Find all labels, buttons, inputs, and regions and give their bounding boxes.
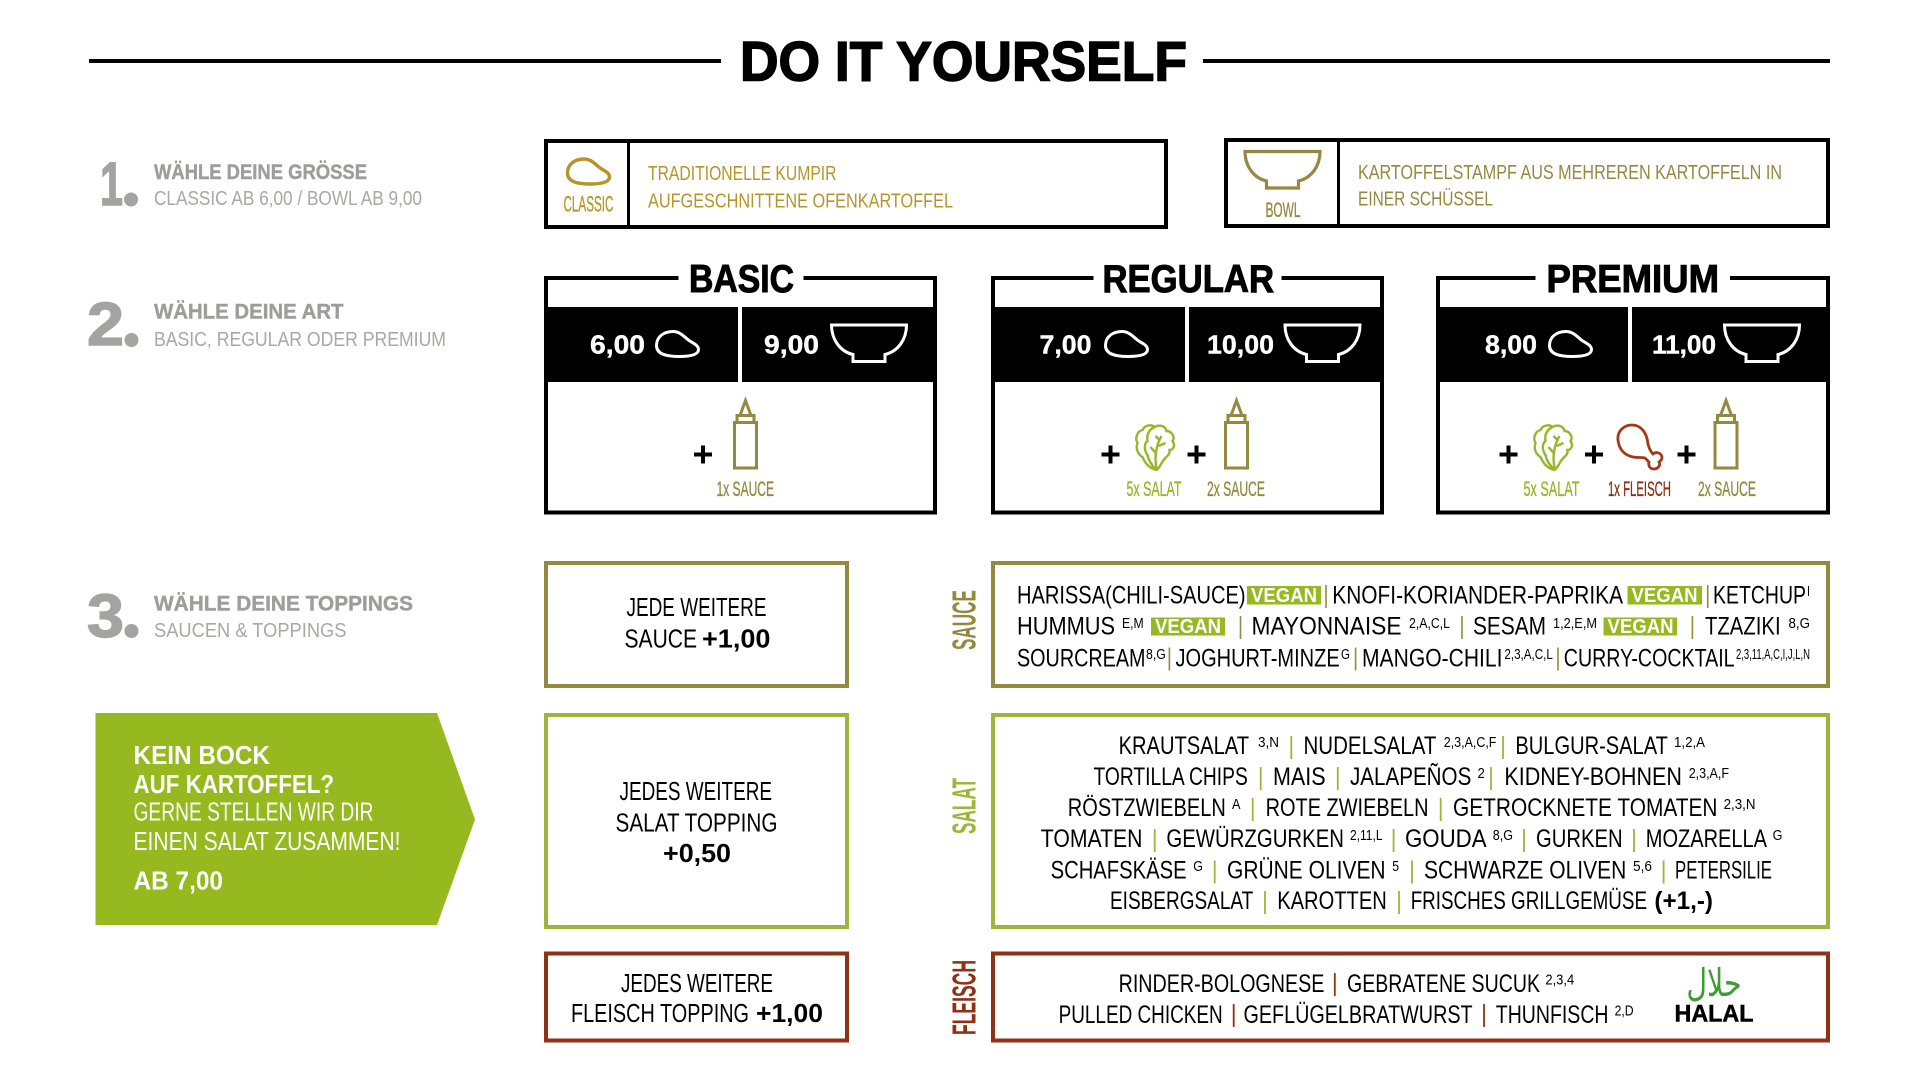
panel: salat list: SCHWARZE OLIVEN — [1424, 856, 1626, 884]
panel: extra salad price — [546, 715, 847, 927]
panel: sauce list: TZAZIKI — [1705, 613, 1781, 641]
panel: classic size: AUFGESCHNITTENE OFENKARTOFFEL — [648, 190, 953, 212]
callout: salad arrow: KEIN BOCK — [134, 740, 270, 770]
panel: bowl size: BOWL — [1266, 199, 1300, 222]
panel: sauce list: 2,3,11,A,C,I,J,L,N — [1736, 646, 1810, 663]
panel: regular: 10,00 — [1207, 330, 1274, 360]
icon: bowl — [1724, 325, 1800, 362]
panel: extra meat price: +1,00 — [756, 998, 823, 1028]
panel: salat list: 2 — [1478, 765, 1485, 782]
panel: extra salad price: SALAT TOPPING — [616, 808, 778, 838]
panel: salat list: GURKEN — [1536, 825, 1623, 853]
panel: basic — [544, 258, 937, 512]
panel: sauce list: 2,A,C,L — [1409, 615, 1450, 632]
panel: salat list: (+1,-) — [1654, 887, 1713, 915]
step 1 heading: 1 — [100, 150, 123, 218]
panel: salat list: GOUDA — [1405, 825, 1487, 853]
icon: bowl — [1245, 152, 1320, 188]
panel: salat list: BULGUR-SALAT — [1515, 732, 1668, 760]
step 3 heading: WÄHLE DEINE TOPPINGS — [154, 592, 413, 616]
step 2 heading — [87, 290, 446, 358]
panel: premium: 2x SAUCE — [1698, 478, 1756, 501]
panel: sauce list: CURRY-COCKTAIL — [1564, 644, 1735, 672]
panel: extra sauce price: +1,00 — [702, 623, 770, 653]
panel: salat list: GRÜNE OLIVEN — [1227, 856, 1386, 884]
panel: classic size: TRADITIONELLE KUMPIR — [648, 163, 836, 185]
panel: sauce list: KNOFI-KORIANDER-PAPRIKA — [1332, 582, 1623, 610]
panel: fleisch list: THUNFISCH — [1496, 1001, 1608, 1029]
panel: sauce list: 1,2,E,M — [1553, 615, 1597, 632]
panel: sauce list: I — [1807, 583, 1810, 600]
callout: salad arrow: AUF KARTOFFEL? — [134, 769, 334, 799]
panel: salat list: GEWÜRZGURKEN — [1166, 825, 1344, 853]
panel: salat list: A — [1232, 796, 1240, 813]
panel: bowl size — [1226, 140, 1828, 226]
panel: basic: 9,00 — [764, 330, 819, 360]
panel: sauce list: HARISSA(CHILI-SAUCE) — [1017, 582, 1246, 610]
vegan badges: VEGAN — [1632, 585, 1698, 607]
panel: fleisch list: RINDER-BOLOGNESE — [1119, 970, 1324, 998]
panel: premium: 1x FLEISCH — [1608, 478, 1671, 501]
panel: premium: 5x SALAT — [1524, 478, 1580, 501]
panel: sauce list: G — [1341, 646, 1350, 663]
callout: salad arrow — [96, 713, 475, 925]
callout: salad arrow: GERNE STELLEN WIR DIR — [134, 796, 374, 826]
panel: sauce list: E,M — [1122, 615, 1144, 632]
panel: sauce list — [993, 563, 1828, 686]
panel: salat list: G — [1193, 858, 1203, 875]
vegan badges: VEGAN — [1251, 585, 1317, 607]
icon: halal: حلال — [1686, 961, 1742, 1005]
label: fleisch: FLEISCH — [946, 960, 982, 1035]
plus sign — [694, 446, 712, 464]
panel: salat list: TOMATEN — [1041, 825, 1142, 853]
heading: regular: REGULAR — [1102, 258, 1274, 301]
panel: sauce list: HUMMUS — [1017, 613, 1115, 641]
panel: salat list: KAROTTEN — [1277, 887, 1387, 915]
panel: classic size — [546, 141, 1166, 227]
panel: fleisch list: GEBRATENE SUCUK — [1347, 970, 1540, 998]
panel: salat list: PETERSILIE — [1675, 856, 1772, 884]
icon: lettuce — [1534, 425, 1572, 470]
panel: salat list: MAIS — [1273, 763, 1326, 791]
icon: classic potato — [568, 159, 610, 184]
panel: salat list: JALAPEÑOS — [1350, 762, 1471, 791]
step 2 heading: 2 — [87, 290, 124, 358]
panel: salat list — [993, 715, 1828, 927]
panel: salat list: 1,2,A — [1674, 734, 1705, 751]
panel: salat list: KIDNEY-BOHNEN — [1504, 763, 1682, 791]
icon: chicken leg — [1618, 425, 1662, 469]
panel: sauce list: MAYONNAISE — [1252, 613, 1402, 641]
panel: salat list: 3,N — [1258, 734, 1279, 751]
step 1 heading: WÄHLE DEINE GRÖSSE — [154, 161, 367, 184]
panel: salat list: 2,3,N — [1724, 796, 1756, 813]
panel: salat list: 5,6 — [1633, 858, 1652, 875]
panel: salat list: 5 — [1392, 858, 1399, 875]
vegan badges — [1151, 585, 1702, 638]
callout: salad arrow: AB 7,00 — [134, 866, 223, 896]
panel: basic: 6,00 — [590, 330, 645, 360]
panel: regular: 5x SALAT — [1126, 478, 1182, 501]
panel: salat list: MOZARELLA — [1646, 825, 1767, 853]
label: sauce: SAUCE — [946, 590, 982, 650]
icon: halal — [1674, 961, 1754, 1027]
icon: bowl — [832, 325, 906, 362]
heading: premium: PREMIUM — [1546, 258, 1719, 301]
step 2 heading: WÄHLE DEINE ART — [154, 300, 344, 324]
panel: salat list: GETROCKNETE TOMATEN — [1453, 794, 1718, 822]
panel: extra sauce price: SAUCE — [624, 623, 697, 653]
panel: salat list: 2,3,A,F — [1689, 765, 1729, 782]
icon: sauce bottle — [734, 400, 756, 468]
panel: sauce list: SOURCREAM — [1017, 644, 1146, 672]
panel: premium — [1436, 258, 1830, 512]
panel: premium: 8,00 — [1485, 330, 1537, 360]
panel: fleisch list: PULLED CHICKEN — [1059, 1001, 1223, 1029]
panel: salat list: RÖSTZWIEBELN — [1068, 794, 1226, 822]
panel: salat list: 2,3,A,C,F — [1444, 734, 1496, 751]
panel: salat list: 2,11,L — [1350, 827, 1382, 844]
icon: potato — [656, 332, 698, 356]
icon: bowl — [1285, 325, 1360, 362]
vegan badges: VEGAN — [1155, 616, 1221, 638]
panel: salat list: KRAUTSALAT — [1119, 732, 1249, 760]
panel: extra meat price: JEDES WEITERE — [621, 968, 773, 998]
step 1 heading: CLASSIC AB 6,00 / BOWL AB 9,00 — [154, 188, 422, 210]
panel: regular — [991, 258, 1384, 512]
panel: salat list: 8,G — [1493, 827, 1513, 844]
panel: sauce list: MANGO-CHILI — [1362, 644, 1502, 672]
panel: sauce list: 8,G — [1788, 615, 1810, 632]
icon: halal: HALAL — [1674, 1000, 1754, 1027]
panel: fleisch list — [993, 954, 1828, 1040]
panel: salat list: ROTE ZWIEBELN — [1266, 794, 1428, 822]
panel: classic size: CLASSIC — [564, 192, 614, 216]
icon: sauce bottle — [1226, 400, 1248, 468]
callout: salad arrow: EINEN SALAT ZUSAMMEN! — [134, 826, 400, 856]
panel: fleisch list: 2,D — [1615, 1002, 1634, 1020]
panel: salat list: NUDELSALAT — [1304, 732, 1436, 760]
panel: extra sauce price: JEDE WEITERE — [626, 592, 766, 622]
icon: potato — [1550, 332, 1592, 356]
icon: potato — [1106, 332, 1148, 356]
panel: sauce list: SESAM — [1473, 613, 1546, 641]
panel: salat list: SCHAFSKÄSE — [1051, 856, 1187, 884]
panel: premium: 11,00 — [1652, 330, 1716, 360]
panel: extra meat price — [546, 954, 847, 1040]
step 3 heading — [87, 582, 413, 650]
step 1 heading — [100, 150, 422, 218]
panel: salat list: G — [1773, 827, 1782, 844]
step 2 heading: BASIC, REGULAR ODER PREMIUM — [154, 329, 446, 351]
panel: sauce list: KETCHUP — [1713, 582, 1806, 610]
panel: sauce list: 2,3,A,C,L — [1504, 646, 1553, 663]
step 3 heading: 3 — [87, 582, 124, 650]
label: salat: SALAT — [946, 778, 982, 834]
panel: salat list: FRISCHES GRILLGEMÜSE — [1411, 887, 1647, 915]
panel: bowl size: KARTOFFELSTAMPF AUS MEHREREN KARTOFFELN IN — [1358, 162, 1782, 184]
panel: extra salad price: +0,50 — [663, 838, 731, 868]
panel: salat list: EISBERGSALAT — [1110, 887, 1253, 915]
panel: sauce list: 8,G — [1146, 646, 1166, 663]
panel: extra sauce price — [546, 563, 847, 686]
panel: extra meat price: FLEISCH TOPPING — [571, 998, 749, 1028]
title: DO IT YOURSELF — [740, 30, 1187, 92]
panel: fleisch list: 2,3,4 — [1545, 972, 1574, 988]
icon: sauce bottle — [1715, 400, 1737, 468]
icon: lettuce — [1136, 425, 1174, 470]
step 3 heading: SAUCEN & TOPPINGS — [154, 620, 346, 642]
plus sign — [1500, 446, 1696, 464]
panel: regular: 2x SAUCE — [1207, 478, 1265, 501]
panel: salat list: TORTILLA CHIPS — [1094, 763, 1248, 791]
plus sign — [1102, 446, 1206, 464]
panel: fleisch list: GEFLÜGELBRATWURST — [1244, 1001, 1473, 1029]
panel: bowl size: EINER SCHÜSSEL — [1358, 189, 1493, 211]
panel: basic: 1x SAUCE — [716, 478, 774, 501]
panel: regular: 7,00 — [1040, 330, 1092, 360]
heading: basic: BASIC — [689, 258, 794, 301]
title — [89, 30, 1830, 92]
vegan badges: VEGAN — [1608, 616, 1674, 638]
panel: sauce list: JOGHURT-MINZE — [1176, 644, 1340, 672]
panel: extra salad price: JEDES WEITERE — [620, 776, 772, 806]
